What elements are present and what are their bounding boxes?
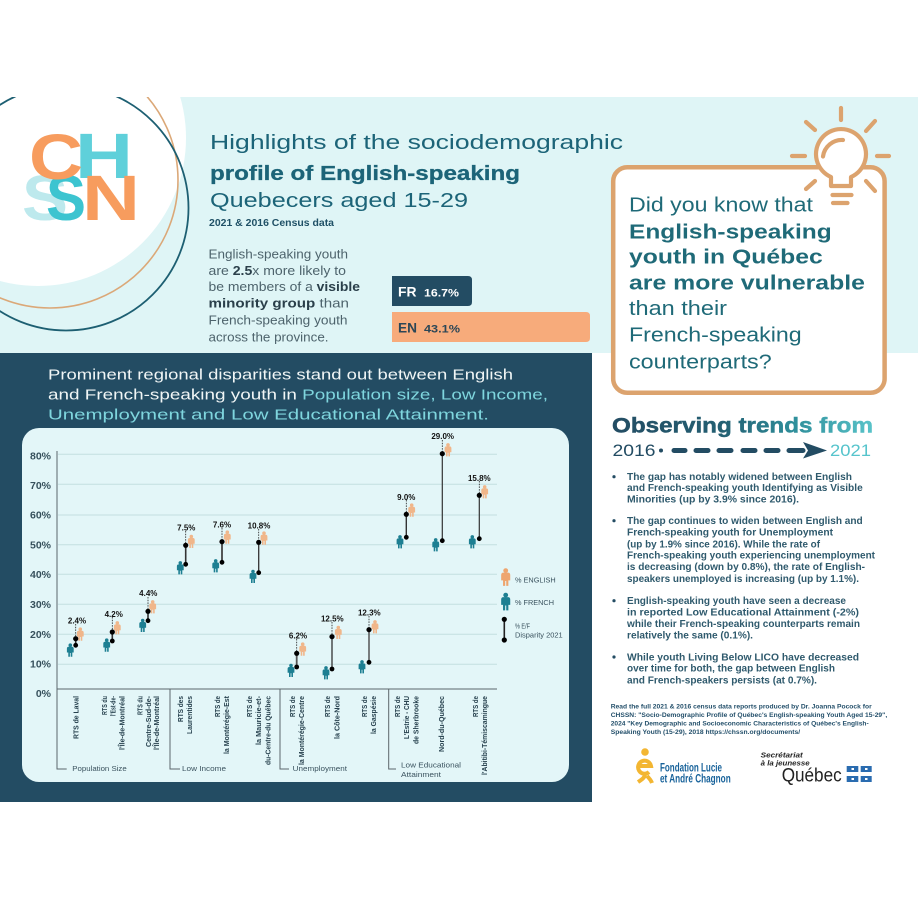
bullet: educational attainment (612, 596, 860, 641)
series: RTS de la Mauricie-et-du-Centre-du Québec: 10.8% (248, 522, 270, 530)
footnote: sources: Speaking Youth (15-29), 2018 https://chssn.org/documents/ (611, 729, 800, 736)
region axis labels: RTS des (176, 696, 185, 722)
series: RTS de la Montérégie-Est: 7.6% (213, 520, 231, 530)
bullet: unemployment: (up by 1.9% since 2016). While the rate of (627, 539, 821, 550)
subtitle: census data: 2021 & 2016 Census data (209, 218, 334, 229)
bullet: LICO (612, 652, 859, 686)
footnote: sources: 2024 "Key Demographic and Socioeconomic Characteristics of Québec's English- (611, 720, 869, 728)
callout text: than their (629, 298, 727, 320)
category labels: Attainment (401, 770, 442, 779)
logo: Secrétariat à la jeunesse Québec: Québec (782, 765, 842, 787)
series: RTS de Laval (67, 616, 86, 657)
series: RTS de la Gaspésie (358, 608, 381, 673)
title (210, 132, 623, 212)
bullet: visible minorities (612, 472, 863, 505)
region axis labels: du-Centre-du Québec (264, 696, 272, 765)
region axis labels: l'Île-de-Montréal (118, 696, 126, 750)
series: RTS de la Côte-Nord: 12.5% (321, 615, 344, 624)
region axis labels: la Mauricie-et- (254, 696, 263, 745)
region axis labels: RTS de (393, 696, 402, 717)
legend (501, 568, 563, 643)
series: RTS de l'Abitibi-Témiscamingue (468, 474, 491, 548)
region axis labels: RTS de Laval (72, 696, 80, 739)
bullet: LICO: and French-speakers persists (at 0.7%). (627, 675, 817, 686)
text block: visible minority statement: English-speaking youth (208, 247, 348, 261)
bullet: LICO: While youth Living Below LICO have decreased (627, 652, 859, 663)
region axis labels: Nord-du-Québec (437, 696, 446, 752)
chart: disparity dot plot (30, 108, 889, 787)
logo: CHSSN: C (29, 121, 83, 193)
region axis labels: RTS de (245, 696, 254, 717)
text block: visible minority statement (208, 247, 360, 345)
title: Highlights of the sociodemographic (210, 132, 623, 154)
region axis labels: RTS du (136, 696, 144, 715)
panel: regional disparities (0, 353, 592, 802)
footnote: sources: Read the full 2021 & 2016 census data reports produced by Dr. Joanna Pocock for (611, 704, 872, 710)
title: profile of English-speaking (210, 163, 520, 185)
region axis labels: Laurentides (185, 696, 194, 734)
legend: Disparity 2021 (515, 632, 563, 640)
series: RTS de L'Estrie - CHU de Sherbrooke (397, 493, 415, 548)
logo: Fondation Lucie et André Chagnon: et André Chagnon (660, 774, 731, 786)
region axis labels: la Montérégie-Centre (297, 696, 306, 765)
text block: visible minority statement: minority group than (208, 297, 349, 311)
logo: CHSSN: S (46, 162, 86, 234)
region axis labels: l'Abitibi-Témiscamingue (480, 696, 489, 775)
callout text: are more vulnerable (629, 272, 865, 294)
timeline arrow 2016 to 2021: 2016 (612, 441, 656, 460)
logo: Secrétariat à la jeunesse Québec: Secrétariat (761, 750, 803, 760)
y axis labels: 20% (30, 629, 52, 641)
callout: did you know (613, 167, 885, 393)
series: RTS de la Montérégie-Est (212, 520, 231, 572)
region axis labels: la Côte-Nord (332, 696, 342, 739)
timeline arrow 2016 to 2021 (612, 441, 871, 460)
y axis labels (30, 450, 52, 700)
category labels: Population Size (72, 764, 127, 773)
logo: CHSSN: H (75, 120, 133, 192)
region axis labels: de Sherbrooke (412, 696, 420, 744)
region axis labels: RTS de (360, 696, 369, 717)
bar: English 43.1% (392, 312, 590, 342)
bullet: unemployment: French-speaking youth for Unemployment (627, 528, 834, 539)
bullet: educational attainment: in reported Low Educational Attainment (-2%) (627, 607, 859, 618)
series: RTS de la Montérégie-Centre (288, 632, 307, 677)
bullet: educational attainment: relatively the same (0.1%). (627, 630, 753, 641)
series: RTS de l'Est-de-l'Île-de-Montréal (103, 610, 123, 652)
y axis labels: 50% (30, 539, 52, 551)
bullet: unemployment: French-speaking youth experiencing unemployment (627, 551, 876, 562)
title: Quebecers aged 15-29 (210, 190, 468, 212)
bar: French 16.7% (392, 276, 472, 306)
decorative logo rings (0, 97, 190, 332)
category labels: Low Income (182, 764, 226, 773)
bullet: LICO: over time for both, the gap between English (627, 664, 835, 675)
text block: visible minority statement: French-speaking youth (208, 313, 348, 327)
series: RTS du Centre-Sud-de-l'Île-de-Montréal: 4.4% (139, 589, 157, 598)
timeline arrow 2016 to 2021: 2021 (830, 441, 871, 460)
logo: CHSSN (22, 120, 140, 234)
callout text: French-speaking (629, 325, 802, 347)
region axis labels: RTS de (323, 696, 332, 717)
callout text: English-speaking (629, 221, 832, 243)
chart card (22, 428, 569, 782)
region axis labels: Centre-Sud-de- (144, 696, 153, 747)
series: RTS de l'Est-de-l'Île-de-Montréal: 4.2% (105, 610, 123, 619)
region axis labels: RTS de (213, 696, 222, 717)
logo: CHSSN: N (82, 162, 140, 234)
logo: Secrétariat à la jeunesse Québec: à la jeunesse (761, 758, 810, 768)
bar: French 16.7%: 16.7% (424, 288, 459, 300)
bullet: unemployment (612, 516, 876, 585)
icon: lightbulb (792, 108, 889, 203)
y axis labels: 80% (30, 450, 52, 462)
bar: English 43.1%: 43.1% (424, 323, 460, 335)
bar: French 16.7%: FR (398, 284, 416, 300)
region axis labels: la Montérégie-Est (222, 696, 231, 754)
heading: regional disparities (48, 366, 548, 423)
category labels (72, 760, 461, 779)
category labels: Unemployment (293, 764, 348, 773)
series: RTS de l'Abitibi-Témiscamingue: 15.8% (468, 474, 491, 483)
y axis labels: 10% (30, 659, 52, 671)
y axis labels: 30% (30, 599, 52, 611)
region axis labels: l'Est-de- (108, 696, 118, 716)
logo: CHSSN: S (22, 162, 68, 234)
logo: Secrétariat à la jeunesse Québec (761, 750, 872, 787)
logo: Fondation Lucie et André Chagnon (638, 748, 731, 786)
region axis labels: RTS de (288, 696, 297, 717)
legend: % FRENCH (515, 600, 554, 607)
logo: Fondation Lucie et André Chagnon: Fondation Lucie (660, 763, 722, 775)
series: RTS de la Gaspésie: 12.3% (358, 608, 381, 618)
heading: regional disparities: Prominent regional disparities stand out between English (48, 366, 513, 383)
bullet: visible minorities: and French-speaking youth Identifying as Visible (627, 483, 863, 494)
series: Nord-du-Québec: 29.0% (431, 432, 454, 441)
text block: trends bullets (612, 472, 876, 686)
region axis labels (72, 696, 489, 775)
region axis labels: L'Estrie - CHU (402, 696, 411, 739)
series: RTS de L'Estrie - CHU de Sherbrooke: 9.0% (397, 493, 415, 502)
series: RTS de la Mauricie-et-du-Centre-du Québec (248, 522, 270, 583)
bullet: visible minorities: Minorities (up by 3.9% since 2016). (627, 494, 799, 505)
callout text (629, 195, 865, 373)
series: RTS des Laurentides (177, 524, 195, 574)
y axis labels: 0% (36, 688, 52, 700)
series: RTS du Centre-Sud-de-l'Île-de-Montréal (139, 589, 157, 632)
category labels: Low Educational (401, 760, 461, 770)
heading: observing trends: Observing trends from (612, 414, 873, 438)
series: Nord-du-Québec (431, 432, 454, 551)
series: RTS de la Côte-Nord (321, 615, 344, 679)
legend: % ENGLISH (515, 578, 556, 585)
callout text: Did you know that (629, 195, 814, 217)
callout text: youth in Québec (629, 246, 823, 268)
legend: % E/F (515, 624, 530, 631)
text block: visible minority statement: across the province. (208, 331, 328, 345)
region axis labels: la Gaspésie (369, 696, 378, 734)
bullet: visible minorities: The gap has notably widened between English (627, 472, 852, 483)
y axis labels: 40% (30, 569, 52, 581)
bullet: educational attainment: English-speaking youth have seen a decrease (627, 596, 846, 607)
y axis labels: 70% (30, 480, 52, 492)
top banner background (0, 97, 918, 353)
series: RTS des Laurentides: 7.5% (177, 524, 195, 532)
text block: visible minority statement: are 2.5x more likely to (208, 264, 346, 278)
bullet: unemployment: The gap continues to widen between English and (627, 516, 863, 527)
bullet: unemployment: speakers unemployed is increasing (up by 1.1%). (627, 574, 859, 585)
y axis labels: 60% (30, 510, 52, 522)
series: RTS de Laval: 2.4% (68, 616, 86, 626)
callout text: counterparts? (629, 351, 772, 373)
heading: regional disparities: Unemployment and Low Educational Attainment. (48, 406, 489, 423)
bar: English 43.1%: EN (398, 319, 417, 335)
region axis labels: RTS de (471, 696, 480, 717)
bullet: educational attainment: while their French-speaking counterparts remain (626, 619, 860, 630)
footnote: sources: CHSSN: "Socio-Demographic Profile of Québec's English-speaking Youth Aged 15-29", (611, 712, 887, 719)
region axis labels: l'Île-de-Montréal (152, 696, 161, 750)
heading: regional disparities: and French-speaking youth in Population size, Low Income, (48, 386, 548, 403)
region axis labels: RTS du (100, 696, 109, 715)
footnote: sources (611, 704, 887, 736)
series: RTS de la Montérégie-Centre: 6.2% (289, 632, 307, 640)
bullet: unemployment: is decreasing (down by 0.8%), the rate of English- (627, 562, 865, 573)
text block: visible minority statement: be members of a visible (208, 280, 360, 294)
